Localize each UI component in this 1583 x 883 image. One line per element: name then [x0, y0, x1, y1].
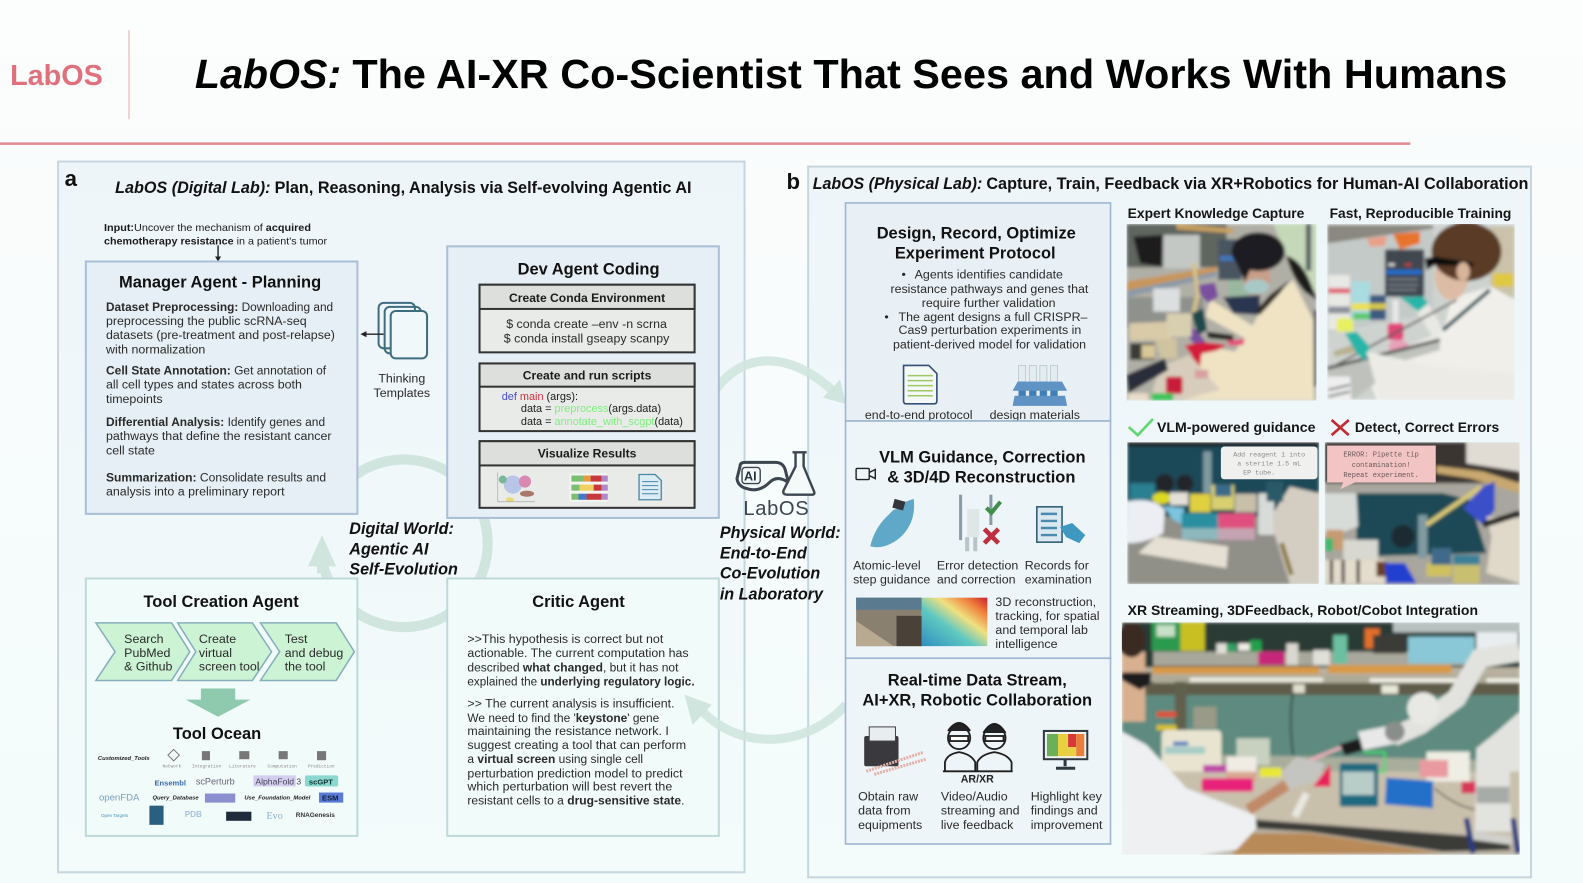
- input prompt: [104, 223, 328, 261]
- manager agent steps: datasets (pre-treatment and post-relapse): [106, 328, 335, 342]
- photo: researcher pipetting with XR glasses: [1127, 224, 1316, 401]
- data stream title: Real-time Data Stream,: [888, 672, 1067, 690]
- protocol title: Design, Record, Optimize: [877, 224, 1076, 242]
- icon: design materials: [1013, 365, 1067, 406]
- manager agent steps: all cell types and states across both: [106, 378, 302, 392]
- tool logos: Evo: [267, 811, 283, 822]
- step: test: [260, 623, 354, 680]
- tool logos: Open Targets: [101, 813, 129, 818]
- scripts step: data = annotate_with_scgpt(data): [521, 416, 683, 428]
- critic agent title: Critic Agent: [532, 593, 625, 611]
- VLM speech bubble: Add reagent 1 into: [1233, 451, 1305, 459]
- step: test: the tool: [285, 659, 325, 673]
- tool logos: Customized_Tools: [98, 756, 150, 762]
- manager agent steps: cell state: [106, 443, 155, 457]
- error speech bubble: Repeat experiment.: [1343, 472, 1419, 480]
- conda step: [480, 285, 695, 352]
- VLM icon labels: and correction: [937, 573, 1016, 587]
- panel label a: a: [65, 166, 78, 191]
- panel b heading: Capture, Train, Feedback via XR+Robotics for Human-AI Collaboration: [986, 175, 1528, 193]
- tool logos: Use_Foundation_Model: [244, 796, 311, 802]
- step: search: & Github: [124, 659, 173, 673]
- protocol bullets: Agents identifies candidate: [915, 268, 1063, 282]
- manager agent steps: Cell State Annotation: Get annotation of: [106, 364, 327, 378]
- critic feedback text: perturbation prediction model to predict: [467, 766, 683, 780]
- data stream icon labels: equipments: [858, 818, 922, 832]
- icon: thinking templates: [360, 303, 427, 358]
- icon: gloved hand: [870, 499, 914, 547]
- physical world caption: Co-Evolution: [720, 564, 820, 582]
- critic feedback text: which perturbation will best revert the: [466, 780, 672, 794]
- tool logos: RNAGenesis: [296, 812, 335, 819]
- VLM icon labels: [853, 558, 1092, 587]
- VLM icon labels: examination: [1025, 573, 1092, 587]
- panel: physical lab: [786, 169, 1528, 855]
- digital world caption: [348, 520, 458, 578]
- manager agent steps: Summarization: Consolidate results and: [106, 471, 326, 485]
- tool logos: [98, 749, 343, 825]
- manager agent steps: [105, 300, 335, 499]
- center logo: LabOS goggles and flask: AI: [744, 470, 757, 484]
- 3D reconstruction caption: and temporal lab: [995, 623, 1088, 637]
- VLM icon labels: Error detection: [937, 558, 1018, 572]
- scripts step: def main (args):: [502, 391, 578, 403]
- manager agent steps: pathways that define the resistant cancer: [106, 429, 332, 443]
- icon: records: [1037, 507, 1085, 543]
- protocol title: Experiment Protocol: [895, 244, 1056, 262]
- VLM title: [879, 448, 1086, 487]
- real-time data stream box: [846, 658, 1111, 844]
- error speech bubble: [1327, 446, 1436, 489]
- photo: error detection view: [1325, 442, 1520, 585]
- logo wordmark: LabOS: [743, 498, 809, 520]
- 3D reconstruction caption: [995, 595, 1100, 651]
- icon: sequencer equipment: [864, 727, 926, 774]
- title: The AI-XR Co-Scientist That Sees and Works With Humans: [352, 51, 1507, 97]
- VLM guidance caption: VLM-powered guidance: [1157, 420, 1316, 435]
- step: create: [178, 623, 272, 680]
- critic feedback text: explained the underlying regulatory logic.: [467, 675, 695, 689]
- visualize step: [480, 441, 695, 508]
- tool logos: Query_Database: [152, 796, 199, 802]
- error speech bubble: ERROR: Pipette tip: [1343, 452, 1419, 460]
- input prompt: chemotherapy resistance in a patient's tumor: [104, 236, 328, 247]
- critic feedback text: [466, 632, 695, 808]
- thinking templates label: Thinking: [378, 372, 425, 386]
- photo caption: fast training: Fast, Reproducible Training: [1330, 206, 1511, 221]
- icon: error detection: [959, 495, 1000, 551]
- protocol bullets: patient-derived model for validation: [893, 337, 1086, 351]
- photo: trainee working in hood: [1327, 222, 1515, 400]
- tool logos: Network: [163, 763, 182, 769]
- icon: camera: [856, 468, 875, 480]
- data stream title: AI+XR, Robotic Collaboration: [862, 692, 1092, 710]
- data stream icon labels: live feedback: [941, 818, 1014, 832]
- critic feedback text: We need to find the 'keystone' gene: [467, 711, 659, 725]
- VLM guidance box: [846, 421, 1111, 658]
- VLM speech bubble: a sterile 1.5 mL: [1237, 460, 1301, 468]
- physical world caption: End-to-End: [720, 544, 808, 562]
- data stream icon labels: findings and: [1031, 804, 1098, 818]
- data stream title: [862, 672, 1092, 710]
- icon: heatmap monitor: [1044, 731, 1087, 768]
- critic feedback text: described what changed, but it has not: [467, 660, 679, 674]
- arrow: physical to digital: [684, 695, 846, 739]
- digital world caption: Agentic AI: [348, 540, 429, 558]
- tool logos: Computation: [268, 763, 297, 769]
- physical world caption: in Laboratory: [720, 586, 824, 604]
- tool ocean title: Tool Ocean: [173, 725, 261, 743]
- scripts step: data = preprocess(args.data): [521, 403, 661, 415]
- manager agent title: Manager Agent - Planning: [119, 274, 321, 292]
- tool logos: Literature: [229, 763, 256, 769]
- thinking templates label: [374, 372, 430, 400]
- protocol bullets: The agent designs a full CRISPR–: [899, 310, 1088, 324]
- panel: digital lab: [65, 166, 719, 836]
- photo caption: XR streaming: XR Streaming, 3DFeedback, Robot/Cobot Integration: [1128, 603, 1478, 618]
- 3D reconstruction caption: 3D reconstruction,: [995, 595, 1096, 609]
- critic feedback text: maintaining the resistance network. I: [467, 724, 669, 738]
- image: 3D reconstruction depth map: [856, 598, 987, 646]
- manager agent steps: Dataset Preprocessing: Downloading and: [106, 300, 333, 314]
- icon: report document: [639, 475, 661, 500]
- data stream icon labels: Highlight key: [1031, 790, 1103, 804]
- manager agent steps: with normalization: [105, 342, 205, 356]
- critic feedback text: >>This hypothesis is correct but not: [467, 632, 664, 646]
- protocol design box: [846, 203, 1111, 422]
- header logo: LabOS: LabOS: [10, 60, 103, 92]
- data stream icon labels: Obtain raw: [858, 790, 918, 804]
- protocol bullets: Cas9 perturbation experiments in: [899, 323, 1081, 337]
- AR/XR label: AR/XR: [961, 773, 994, 785]
- digital world caption: Digital World:: [349, 520, 454, 538]
- VLM title: & 3D/4D Reconstruction: [887, 469, 1075, 487]
- chart: umap scatter: [498, 472, 535, 502]
- 3D reconstruction caption: intelligence: [995, 637, 1058, 651]
- error speech bubble: contamination!: [1352, 462, 1410, 470]
- tool creation title: Tool Creation Agent: [143, 593, 299, 611]
- critic feedback text: a virtual screen using single cell: [467, 752, 643, 766]
- step: create: screen tool: [199, 659, 260, 673]
- tool logos: PDB: [185, 810, 202, 819]
- step: search: Search: [124, 632, 164, 646]
- data stream icon labels: Video/Audio: [941, 790, 1008, 804]
- icon: AR/XR researchers: [943, 723, 1013, 785]
- input prompt: Input:Uncover the mechanism of acquired: [104, 223, 311, 234]
- critic feedback text: >> The current analysis is insufficient.: [467, 697, 675, 711]
- panel a heading: Plan, Reasoning, Analysis via Self-evolving Agentic AI: [275, 179, 692, 197]
- arrow: digital to physical: [712, 361, 846, 404]
- VLM speech bubble: [1221, 447, 1317, 479]
- VLM title: VLM Guidance, Correction: [879, 448, 1086, 466]
- arrow: down to tool ocean: [186, 689, 250, 717]
- data stream icon labels: improvement: [1031, 818, 1103, 832]
- panel b heading: LabOS (Physical Lab):: [813, 175, 982, 193]
- panel b background: [808, 167, 1531, 877]
- photo: XR streaming with cobot: [1118, 622, 1520, 855]
- conda step: $ conda create –env -n scrna: [506, 317, 667, 331]
- tool logos: Prediction: [308, 763, 335, 769]
- protocol icon labels: design materials: [990, 408, 1080, 422]
- step: test: and debug: [285, 646, 343, 660]
- thinking templates label: Templates: [374, 386, 430, 400]
- data stream icon labels: [858, 790, 1103, 832]
- tool logos: scPerturb: [196, 776, 235, 786]
- tool logos: Integration: [192, 763, 221, 769]
- data stream icon labels: data from: [858, 804, 911, 818]
- 3D reconstruction caption: tracking, for spatial: [995, 609, 1100, 623]
- photo: VLM guidance view: [1127, 442, 1319, 584]
- VLM speech bubble: EP tube.: [1243, 469, 1275, 477]
- dev agent box: [447, 246, 719, 518]
- critic feedback text: suggest creating a tool that can perform: [467, 738, 686, 752]
- step: create: Create: [199, 632, 236, 646]
- manager agent steps: analysis into a preliminary report: [106, 485, 285, 499]
- critic feedback text: actionable. The current computation has: [467, 646, 689, 660]
- physical world caption: Physical World:: [720, 524, 841, 542]
- scripts step: Create and run scripts: [523, 369, 652, 383]
- data stream icon labels: streaming and: [941, 804, 1020, 818]
- digital world caption: Self-Evolution: [349, 560, 458, 578]
- manager agent steps: Differential Analysis: Identify genes and: [106, 415, 325, 429]
- protocol bullets: require further validation: [922, 296, 1056, 310]
- conda step: $ conda install gseapy scanpy: [504, 331, 670, 345]
- icon: protocol document: [904, 365, 937, 404]
- VLM icon labels: Atomic-level: [853, 558, 921, 572]
- VLM icon labels: Records for: [1025, 558, 1089, 572]
- protocol bullets: •: [902, 268, 906, 282]
- error detection caption: Detect, Correct Errors: [1355, 420, 1500, 435]
- tool logos: AlphaFold 3: [255, 776, 301, 786]
- photo caption: expert knowledge capture: Expert Knowledge Capture: [1128, 206, 1305, 221]
- critic agent box: [447, 578, 719, 836]
- protocol icon labels: end-to-end protocol: [865, 408, 973, 422]
- step: search: PubMed: [124, 646, 170, 660]
- manager agent steps: preprocessing the public scRNA-seq: [106, 314, 307, 328]
- tool logos: ESM: [322, 794, 338, 803]
- center logo: LabOS goggles and flask: [737, 452, 814, 520]
- physical world caption: [720, 524, 841, 604]
- arrow: digital world self-evolution cycle: [308, 459, 488, 627]
- manager agent steps: timepoints: [106, 392, 163, 406]
- protocol bullets: resistance pathways and genes that: [890, 282, 1089, 296]
- protocol title: [877, 224, 1076, 262]
- conda step: Create Conda Environment: [509, 291, 665, 305]
- title: LabOS:: [195, 51, 341, 97]
- manager agent box: [86, 261, 357, 514]
- step: test: Test: [285, 632, 308, 646]
- tool logos: scGPT: [309, 777, 333, 786]
- scripts step: [480, 363, 695, 431]
- protocol icon labels: [865, 408, 1080, 422]
- critic feedback text: resistant cells to a drug-sensitive state.: [467, 794, 684, 808]
- protocol bullets: [884, 268, 1089, 351]
- tool logos: openFDA: [99, 793, 140, 804]
- step: create: virtual: [199, 646, 232, 660]
- tool creation agent box: [86, 578, 357, 836]
- visualize step: Visualize Results: [538, 446, 637, 460]
- panel a background: [58, 162, 745, 872]
- VLM icon labels: step guidance: [853, 573, 930, 587]
- chart: stacked bars: [569, 474, 608, 502]
- step: search: [96, 623, 190, 680]
- panel label b: b: [786, 169, 800, 194]
- dev agent title: Dev Agent Coding: [518, 261, 660, 279]
- tool logos: Ensembl: [154, 778, 186, 787]
- panel a heading: LabOS (Digital Lab):: [115, 179, 271, 197]
- protocol bullets: •: [884, 310, 889, 324]
